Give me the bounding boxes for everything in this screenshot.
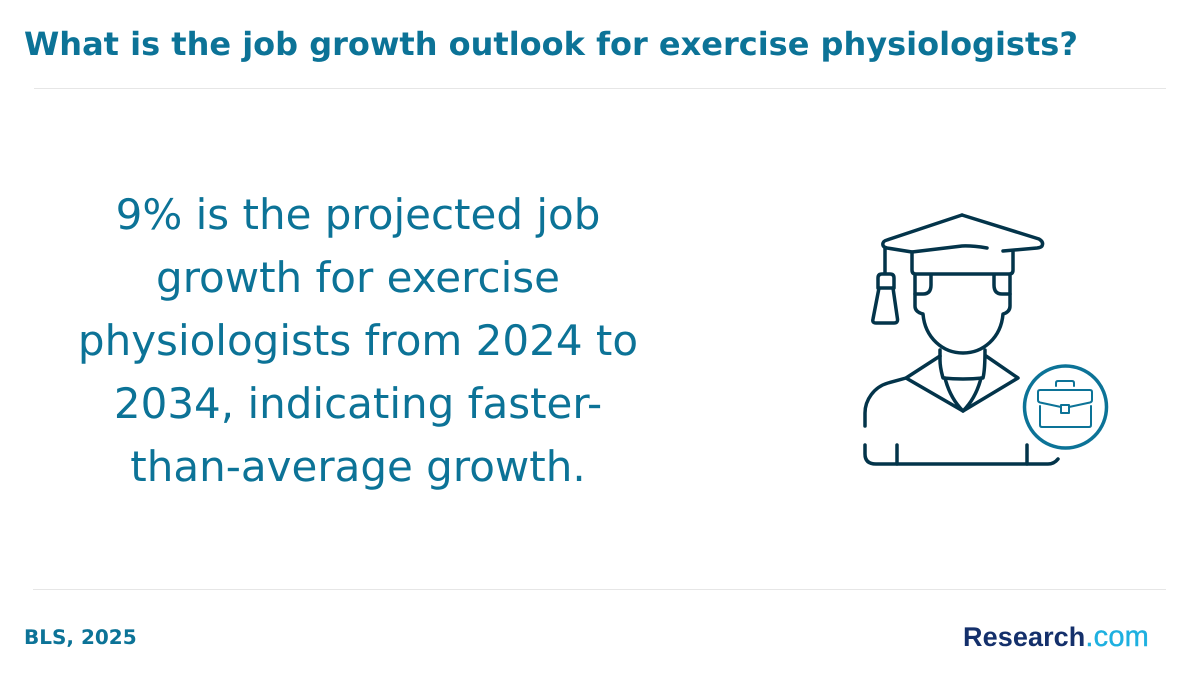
icon: graduate with briefcase bbox=[863, 213, 1108, 466]
title: What is the job growth outlook for exercise physiologists? bbox=[24, 25, 1078, 63]
icon: briefcase badge bbox=[1024, 366, 1106, 448]
main statement: 2034, indicating faster- bbox=[114, 379, 602, 428]
main statement: growth for exercise bbox=[156, 253, 560, 302]
main statement: than-average growth. bbox=[130, 442, 586, 491]
main statement: 9% is the projected job bbox=[116, 190, 600, 239]
main statement: physiologists from 2024 to bbox=[78, 316, 638, 365]
main statement bbox=[78, 190, 638, 491]
source: BLS, 2025 bbox=[24, 625, 137, 649]
logo: Research.com: Research.com bbox=[963, 621, 1149, 653]
icon: graduate bbox=[865, 215, 1058, 464]
